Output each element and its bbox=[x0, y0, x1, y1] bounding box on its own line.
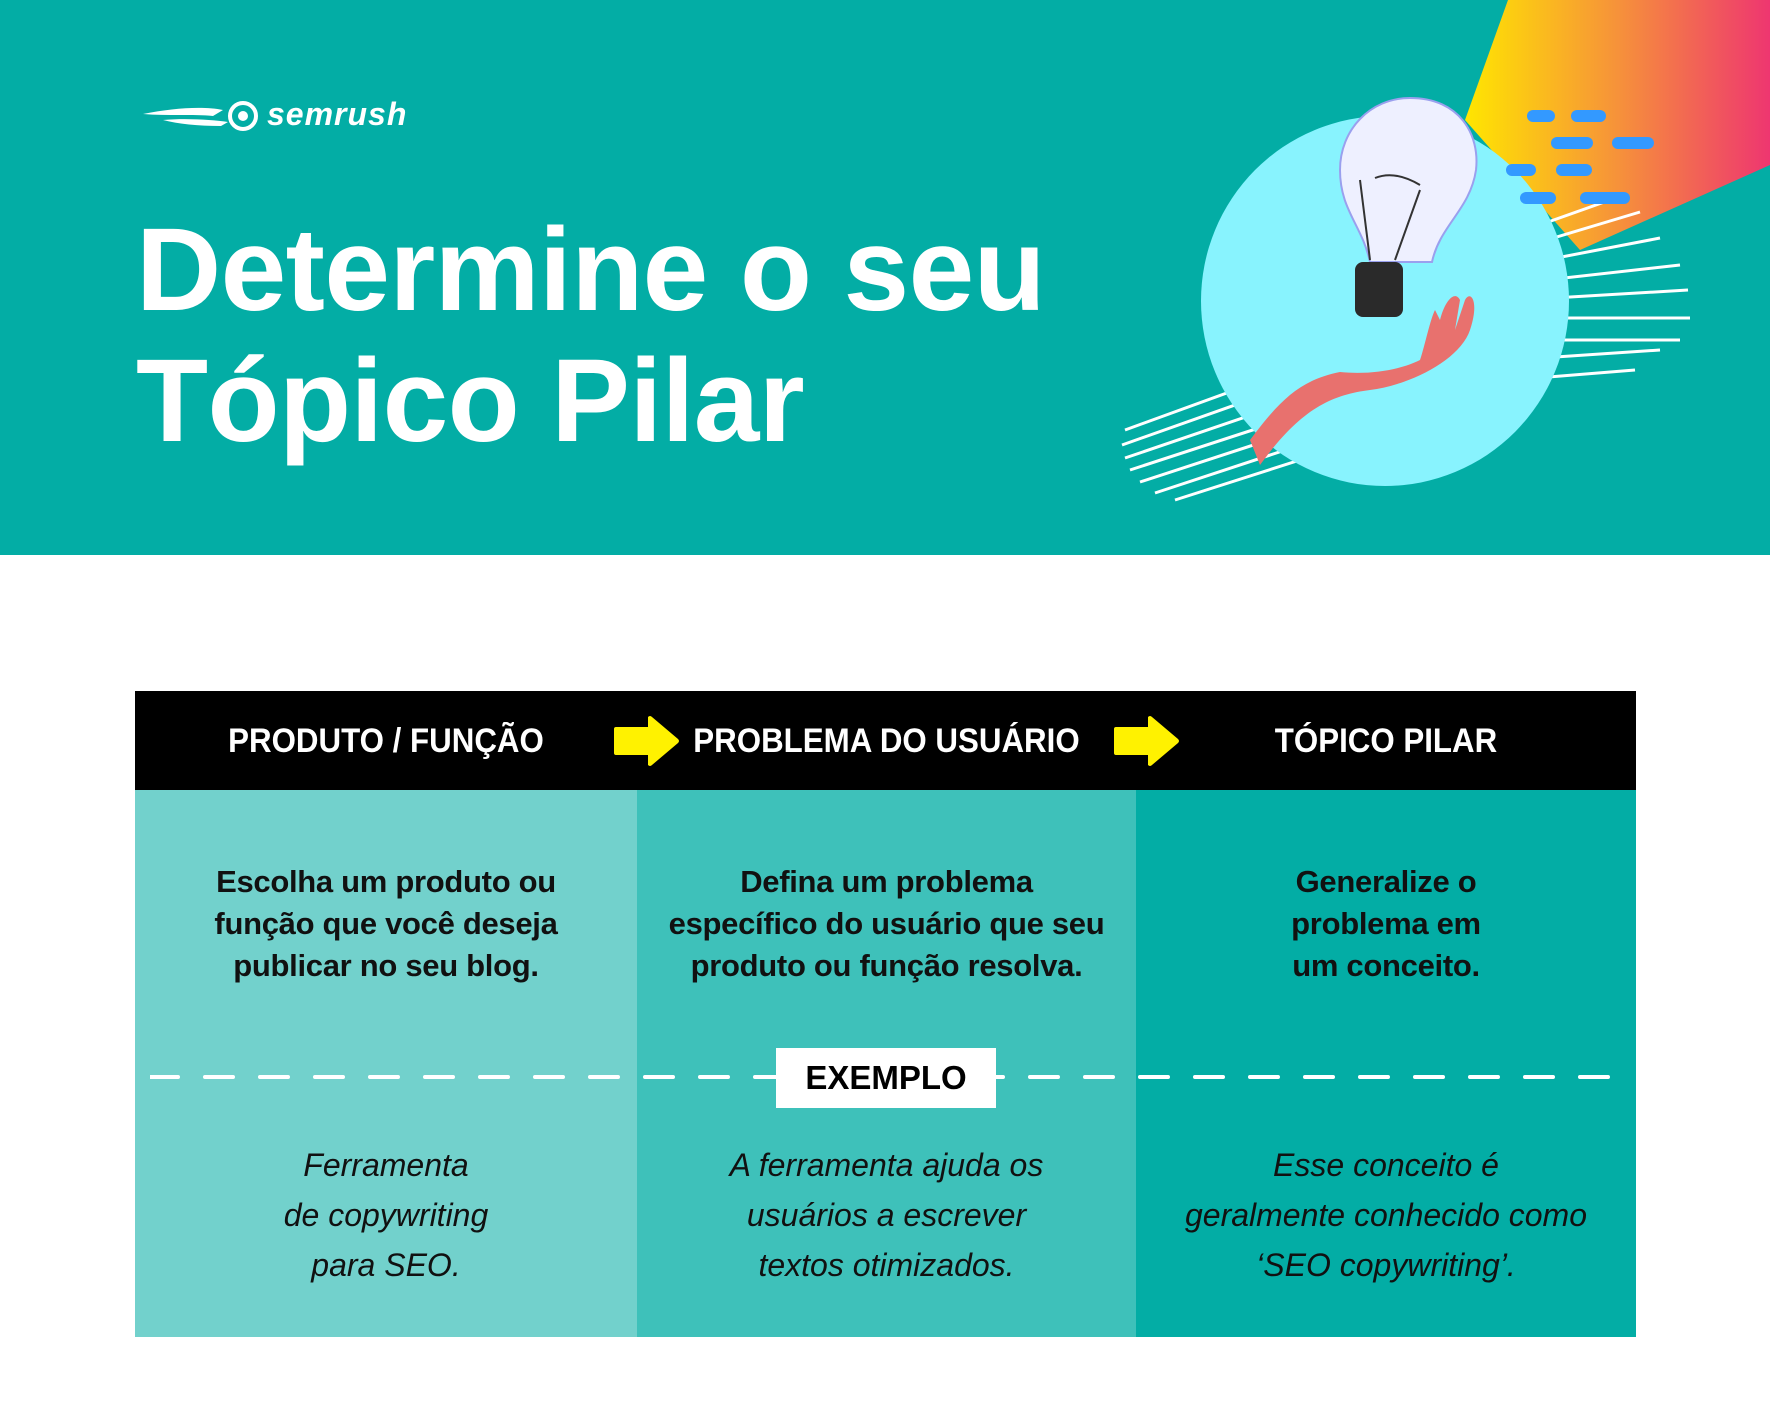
logo: semrush bbox=[143, 96, 407, 132]
example: col 3: geralmente conhecido como bbox=[1185, 1197, 1587, 1233]
text: col 3 bbox=[1291, 864, 1481, 983]
table bbox=[135, 691, 1636, 1337]
column backgrounds bbox=[135, 790, 637, 1337]
dashed divider bbox=[150, 1075, 1610, 1079]
text: col 3: um conceito. bbox=[1292, 948, 1480, 983]
header: produto / função: PRODUTO / FUNÇÃO bbox=[228, 722, 544, 760]
example: col 1: para SEO. bbox=[311, 1247, 461, 1283]
text: col 3: Generalize o bbox=[1296, 864, 1476, 899]
text: col 2: específico do usuário que seu bbox=[669, 906, 1104, 941]
example: col 2: textos otimizados. bbox=[758, 1247, 1015, 1283]
example: col 3 bbox=[1185, 1147, 1587, 1283]
example: col 3: ‘SEO copywriting’. bbox=[1256, 1247, 1516, 1283]
text: col 2: produto ou função resolva. bbox=[691, 948, 1082, 983]
header banner bbox=[0, 0, 1770, 555]
arrow 2 bbox=[1114, 716, 1179, 766]
exemplo label bbox=[776, 1048, 996, 1108]
example: col 1: Ferramenta bbox=[303, 1147, 469, 1183]
header: tópico pilar: TÓPICO PILAR bbox=[1275, 722, 1497, 760]
example: col 2: A ferramenta ajuda os bbox=[730, 1147, 1043, 1183]
header: problema do usuário: PROBLEMA DO USUÁRIO bbox=[693, 722, 1080, 760]
exemplo label: EXEMPLO bbox=[805, 1059, 967, 1096]
example: col 1: de copywriting bbox=[284, 1197, 488, 1233]
title: Determine o seu bbox=[136, 204, 1045, 336]
text: col 1: função que você deseja bbox=[214, 906, 558, 941]
text: col 1: Escolha um produto ou bbox=[216, 864, 556, 899]
title bbox=[136, 204, 1045, 467]
logo: semrush: semrush bbox=[267, 96, 407, 132]
text: col 1 bbox=[214, 864, 558, 983]
title: Tópico Pilar bbox=[136, 335, 804, 467]
text: col 3: problema em bbox=[1291, 906, 1481, 941]
text: col 2 bbox=[669, 864, 1104, 983]
header bar bbox=[135, 691, 1636, 790]
example: col 2 bbox=[728, 1147, 1043, 1283]
example: col 3: Esse conceito é bbox=[1273, 1147, 1499, 1183]
arrow 1 bbox=[614, 716, 679, 766]
text: col 2: Defina um problema bbox=[740, 864, 1033, 899]
text: col 1: publicar no seu blog. bbox=[233, 948, 539, 983]
example: col 2: usuários a escrever bbox=[747, 1197, 1026, 1233]
example: col 1 bbox=[284, 1147, 488, 1283]
illustration: gradient beam, circle, bulb and hand bbox=[1122, 0, 1770, 502]
